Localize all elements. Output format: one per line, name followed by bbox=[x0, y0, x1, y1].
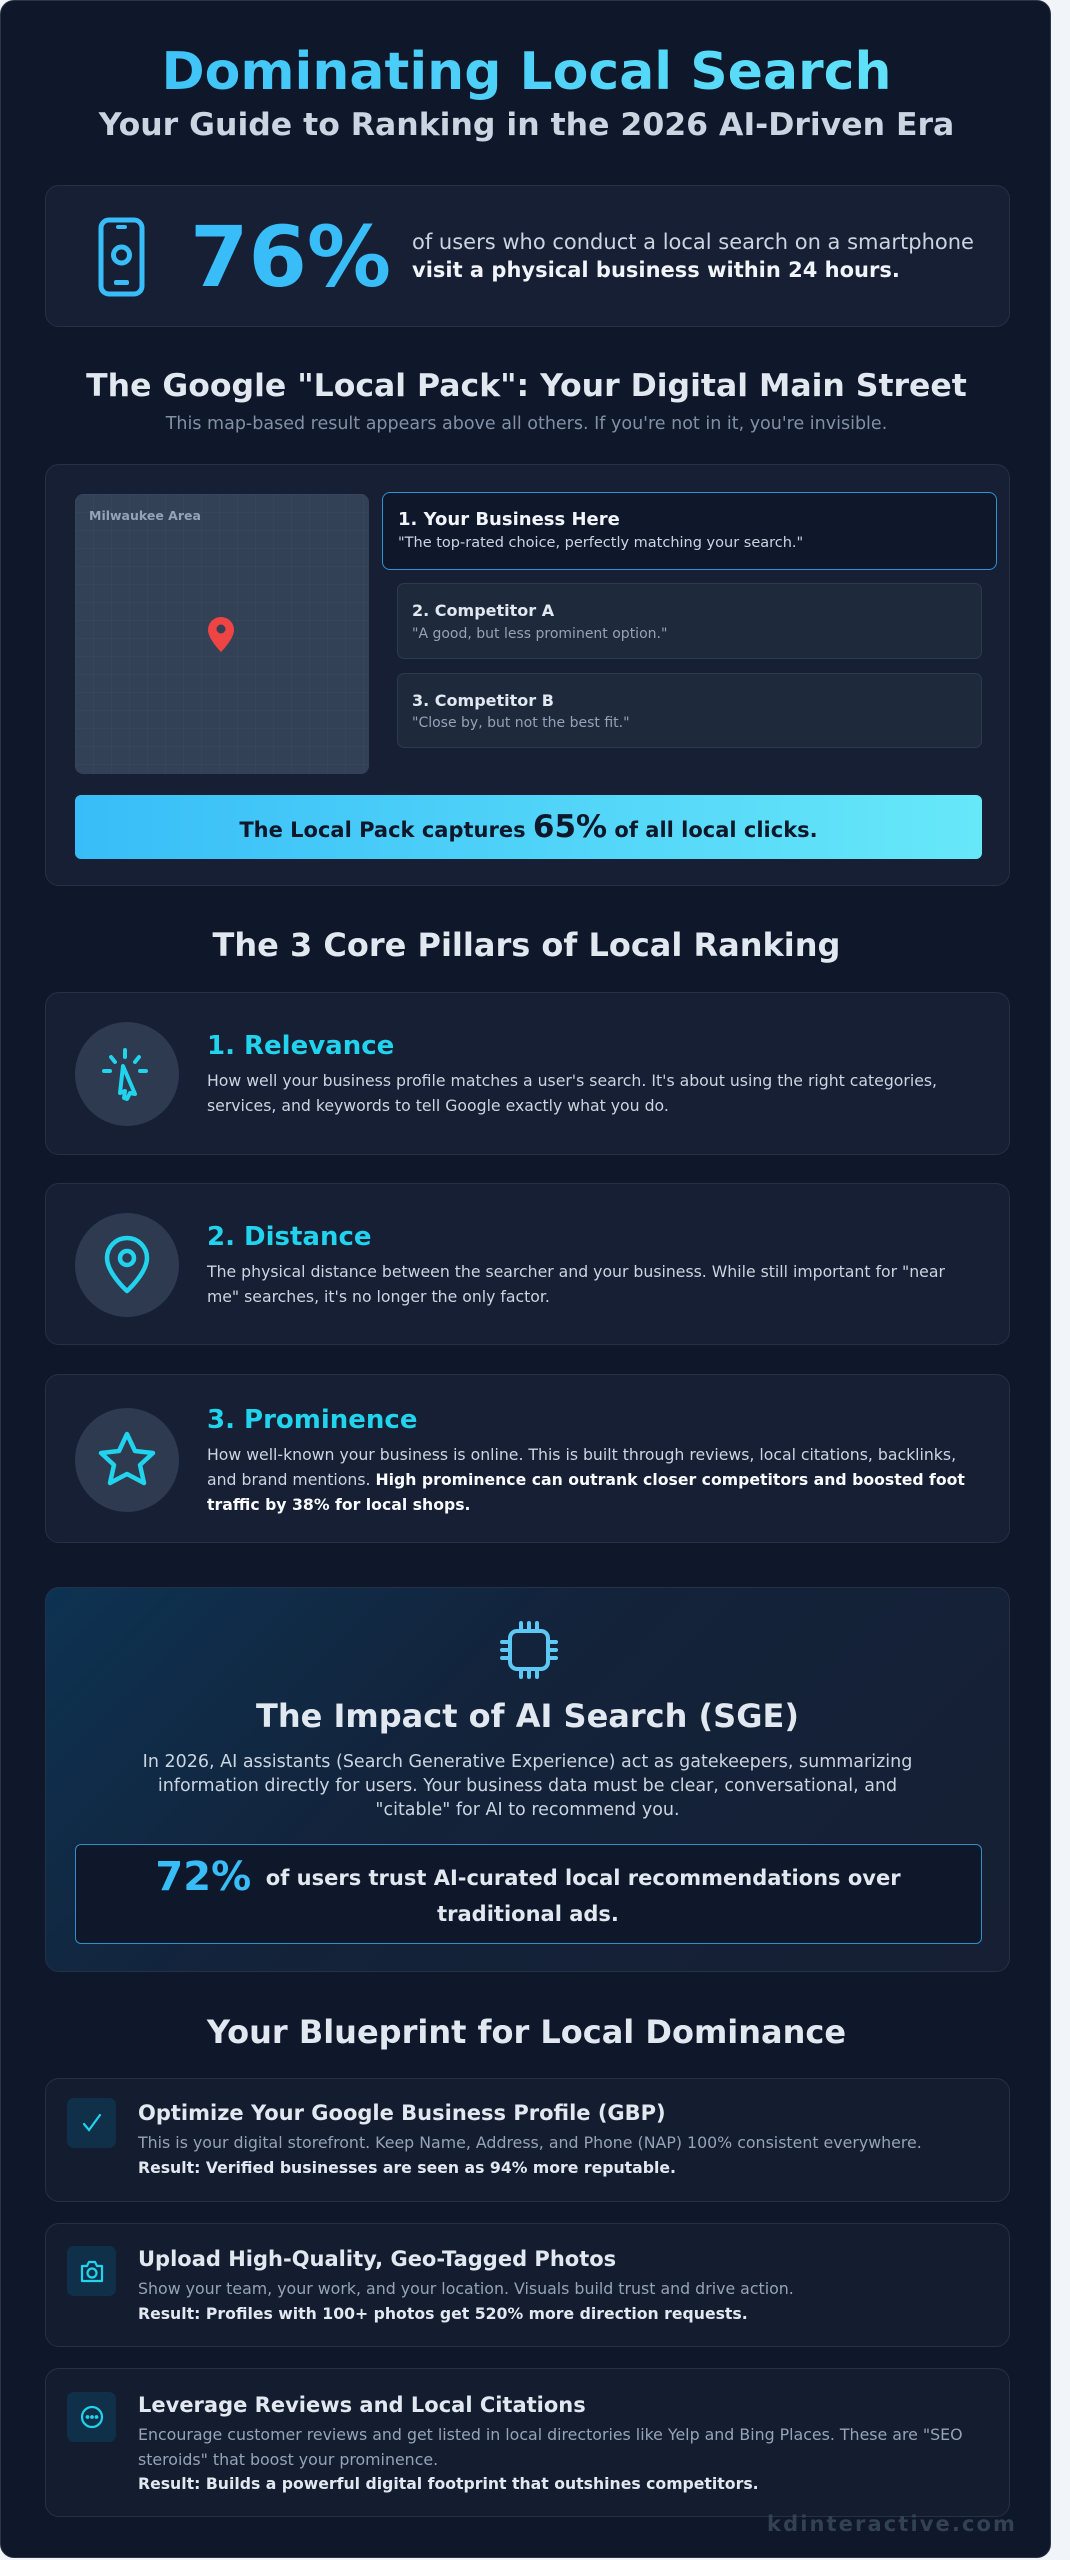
description bbox=[207, 1071, 937, 1115]
stat text: of users who conduct a local search on a smartphone bbox=[412, 230, 974, 254]
title: Dominating Local Search bbox=[161, 42, 892, 102]
result 2: "A good, but less prominent option." bbox=[412, 626, 667, 642]
panel: prominence bbox=[45, 1374, 1010, 1543]
title: Optimize Your Google Business Profile (GBP) bbox=[138, 2101, 666, 2125]
stat text: visit a physical business within 24 hours. bbox=[412, 258, 900, 282]
description: How well-known your business is online. This is built through reviews, local citations, backlinks, bbox=[207, 1445, 956, 1464]
description: Show your team, your work, and your location. Visuals build trust and drive action. bbox=[138, 2279, 794, 2298]
stat: 72% trust: 72% of users trust AI-curated local recommendations over bbox=[155, 1854, 901, 1900]
description: This is your digital storefront. Keep Name, Address, and Phone (NAP) 100% consistent everywhere. bbox=[138, 2133, 922, 2152]
heading: local pack: The Google "Local Pack": Your Digital Main Street bbox=[86, 368, 967, 404]
panel: relevance bbox=[45, 992, 1010, 1155]
panel: local pack bbox=[45, 464, 1010, 886]
result 2: 2. Competitor A bbox=[412, 601, 554, 620]
icon: check bbox=[67, 2098, 116, 2148]
description: steroids" that boost your prominence. bbox=[138, 2450, 438, 2468]
result 1 bbox=[382, 492, 997, 570]
result 3: 3. Competitor B bbox=[412, 691, 554, 710]
panel: GBP bbox=[45, 2078, 1010, 2202]
panel: distance bbox=[45, 1183, 1010, 1345]
description: "citable" for AI to recommend you. bbox=[375, 1800, 680, 1820]
panel: smartphone stat bbox=[45, 185, 1010, 327]
description bbox=[143, 1752, 912, 1820]
result 3: "Close by, but not the best fit." bbox=[412, 715, 630, 731]
icon: location bbox=[75, 1213, 179, 1317]
description bbox=[138, 2279, 794, 2322]
description: Result: Profiles with 100+ photos get 520% more direction requests. bbox=[138, 2304, 748, 2322]
description: information directly for users. Your business data must be clear, conversational, and bbox=[158, 1776, 897, 1796]
description: Result: Builds a powerful digital footprint that outshines competitors. bbox=[138, 2474, 759, 2493]
description: Encourage customer reviews and get listed in local directories like Yelp and Bing Places. These are "SEO bbox=[138, 2425, 963, 2444]
banner: 65% clicks: The Local Pack captures 65% of all local clicks. bbox=[239, 809, 818, 845]
title: 2. Distance bbox=[207, 1222, 372, 1252]
icon: click bbox=[75, 1022, 179, 1126]
result 2 bbox=[397, 583, 982, 659]
description bbox=[207, 1445, 965, 1514]
title: The Impact of AI Search (SGE) bbox=[256, 1697, 799, 1735]
stat number: 76% bbox=[190, 208, 391, 306]
map label: Milwaukee Area bbox=[89, 508, 201, 523]
title: 1. Relevance bbox=[207, 1031, 394, 1061]
description bbox=[206, 1262, 945, 1306]
description: The physical distance between the searcher and your business. While still important for "near bbox=[207, 1262, 945, 1281]
description: me" searches, it's no longer the only factor. bbox=[207, 1287, 550, 1306]
heading: blueprint: Your Blueprint for Local Dominance bbox=[207, 2013, 846, 2051]
stat: 72% trust: traditional ads. bbox=[437, 1902, 619, 1926]
text: local pack subtitle: This map-based result appears above all others. If you're not in it, you're invisible. bbox=[166, 414, 887, 434]
heading: pillars: The 3 Core Pillars of Local Ranking bbox=[213, 926, 840, 964]
description bbox=[138, 2133, 922, 2176]
icon: chat bbox=[67, 2392, 116, 2442]
result 1: "The top-rated choice, perfectly matching your search." bbox=[398, 535, 803, 551]
banner: 65% clicks bbox=[75, 795, 982, 859]
panel: photos bbox=[45, 2223, 1010, 2347]
icon: red pin bbox=[208, 617, 234, 652]
title bbox=[1, 40, 1052, 104]
description: Result: Verified businesses are seen as 94% more reputable. bbox=[138, 2158, 676, 2176]
icon: camera bbox=[67, 2246, 116, 2296]
description: How well your business profile matches a user's search. It's about using the right categories, bbox=[207, 1071, 937, 1090]
result 3 bbox=[397, 673, 982, 748]
title: Upload High-Quality, Geo-Tagged Photos bbox=[138, 2247, 616, 2271]
panel: AI search bbox=[45, 1587, 1010, 1972]
description: and brand mentions. High prominence can outrank closer competitors and boosted foot bbox=[207, 1470, 965, 1489]
icon: smartphone bbox=[98, 218, 144, 296]
description: traffic by 38% for local shops. bbox=[207, 1495, 470, 1514]
description: In 2026, AI assistants (Search Generative Experience) act as gatekeepers, summarizing bbox=[143, 1752, 912, 1772]
map bbox=[75, 494, 369, 774]
description bbox=[138, 2425, 963, 2493]
panel: reviews bbox=[45, 2368, 1010, 2517]
stat: 72% trust bbox=[75, 1844, 982, 1944]
icon: chip bbox=[500, 1621, 558, 1679]
watermark: kdinteractive.com bbox=[767, 2512, 1017, 2536]
title: Leverage Reviews and Local Citations bbox=[138, 2393, 586, 2417]
stat text bbox=[412, 230, 974, 282]
title: 3. Prominence bbox=[207, 1405, 417, 1435]
icon: star bbox=[75, 1408, 179, 1512]
description: services, and keywords to tell Google exactly what you do. bbox=[207, 1096, 669, 1115]
result 1: 1. Your Business Here bbox=[398, 509, 620, 530]
subtitle: Your Guide to Ranking in the 2026 AI-Driven Era bbox=[99, 107, 954, 143]
